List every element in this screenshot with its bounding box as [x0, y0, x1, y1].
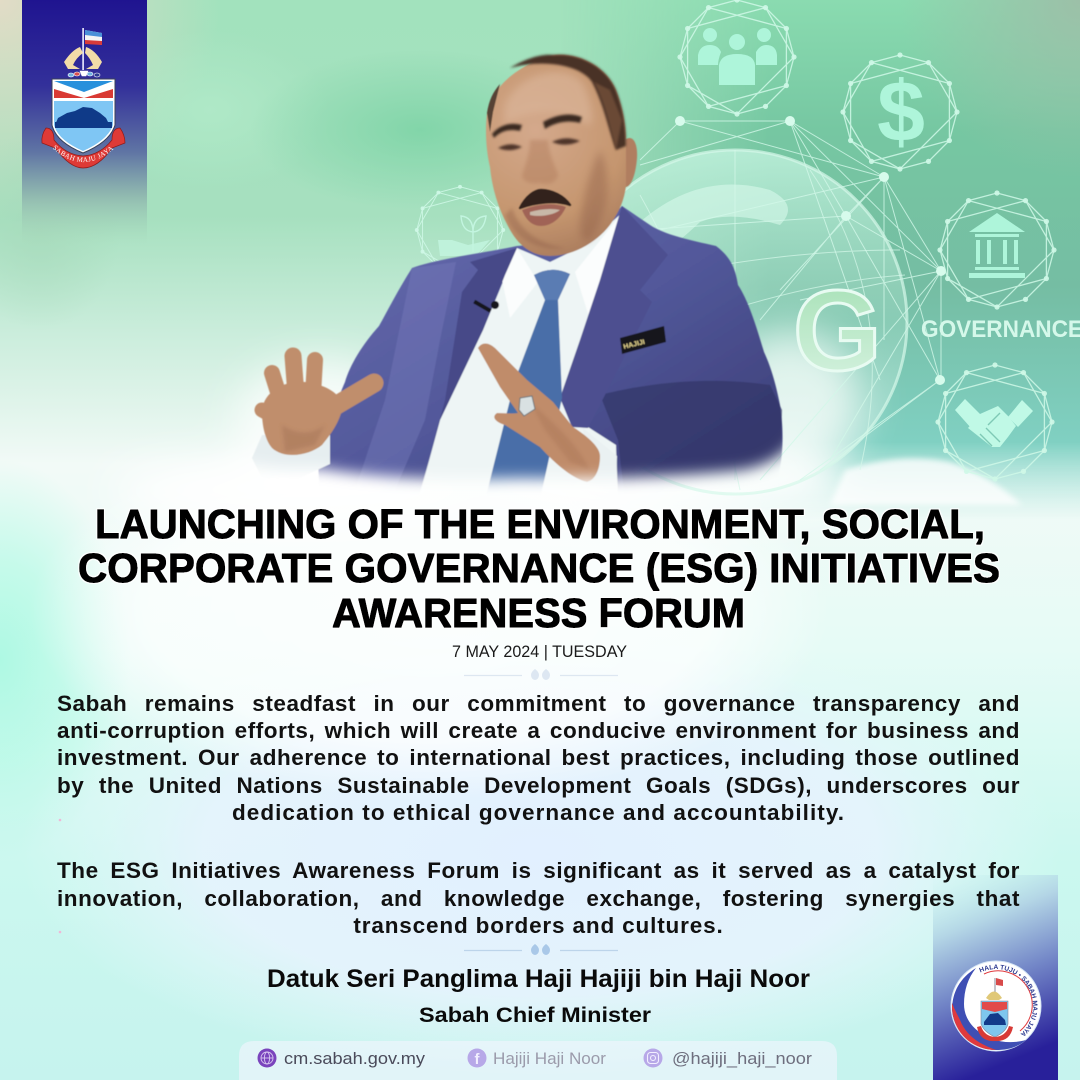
title: CORPORATE GOVERNANCE (ESG) INITIATIVES: [78, 545, 1000, 591]
lapels: [560, 206, 668, 428]
name badge: [620, 326, 666, 354]
date: 7 MAY 2024 | TUESDAY: [452, 643, 627, 661]
title: AWARENESS FORUM: [332, 590, 745, 636]
speaker name: Datuk Seri Panglima Haji Hajiji bin Haji Noor: [267, 965, 810, 993]
facebook: Hajiji Haji Noor: [493, 1050, 607, 1068]
icon ring: people: [677, 0, 797, 117]
eyebrows and eyes: [492, 115, 582, 150]
icon ring: sprout: [415, 185, 505, 275]
letter G: G: [793, 268, 882, 395]
name badge: HAJIJI: [623, 339, 646, 351]
white mist around portrait: [110, 330, 1022, 520]
icon ring: dollar: [840, 52, 960, 172]
icon ring: bank: [937, 190, 1057, 310]
emblem badge: Hala Tuju: [950, 960, 1042, 1052]
divider: bottom quote: [464, 944, 618, 955]
facebook: f: [474, 1051, 480, 1068]
right cuff: [616, 455, 618, 467]
ribbon: top left: [22, 0, 147, 245]
text block: first quote paragraph: Sabah remains steadfast in our commitment to governance transparency and: [57, 691, 1020, 716]
title: [78, 501, 1000, 636]
shirt: [418, 213, 622, 500]
instagram: [644, 1048, 813, 1068]
text block: first quote paragraph: investment. Our adherence to international best practices, including those outlined: [57, 745, 1020, 770]
text block: second quote paragraph: innovation, collaboration, and knowledge exchange, fostering synergies that: [57, 886, 1020, 911]
left cuff: [252, 434, 331, 472]
text block: second quote paragraph: transcend borders and cultures.: [353, 913, 724, 938]
portrait: chief minister: [252, 55, 783, 500]
ring: [519, 396, 535, 416]
text block: first quote paragraph: [57, 691, 1020, 825]
lapel microphone: [473, 300, 499, 313]
globe: [563, 150, 907, 494]
text block: second quote paragraph: [57, 858, 1020, 938]
emblem: Sabah coat of arms: SABAH MAJU JAYA: [52, 146, 114, 162]
emblem: Sabah coat of arms: [42, 28, 126, 168]
divider: top quote: [464, 669, 618, 680]
tie: [485, 270, 570, 500]
left hand: [262, 356, 374, 420]
emblem badge: Hala Tuju: HALA TUJU • SABAH MAJU JAYA: [979, 964, 1038, 1036]
text block: first quote paragraph: anti-corruption efforts, which will create a conducive environment for business and: [57, 718, 1020, 743]
ear and head: [625, 138, 637, 187]
moustache and mouth: [520, 190, 570, 208]
nose: [522, 140, 558, 184]
suit: [318, 206, 783, 500]
ribbon: bottom right: [933, 875, 1058, 1080]
speaker role: Sabah Chief Minister: [419, 1004, 651, 1027]
icon ring: handshake: [935, 362, 1055, 482]
instagram: @hajiji_haji_noor: [672, 1050, 813, 1068]
title: LAUNCHING OF THE ENVIRONMENT, SOCIAL,: [95, 501, 985, 547]
text block: first quote paragraph: dedication to ethical governance and accountability.: [232, 800, 845, 825]
text block: second quote paragraph: The ESG Initiatives Awareness Forum is significant as it served as a catalyst for: [57, 858, 1020, 883]
icon ring: dollar: $: [877, 64, 925, 160]
website: cm.sabah.gov.my: [284, 1050, 426, 1068]
text block: first quote paragraph: by the United Nations Sustainable Development Goals (SDGs), underscores our: [57, 773, 1020, 798]
right hand: [478, 344, 600, 482]
hair: [510, 55, 626, 150]
footer bar: [239, 1041, 837, 1080]
network lines and nodes: [640, 116, 946, 480]
